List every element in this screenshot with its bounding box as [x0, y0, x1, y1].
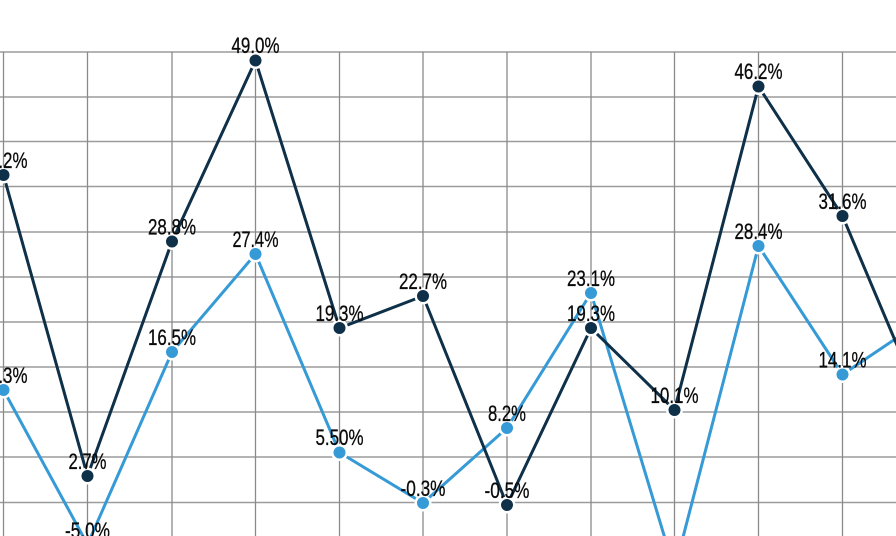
data labels: light blue series: 14.1% [818, 348, 866, 372]
data labels: light blue series [0, 219, 866, 536]
data labels: light blue series: 23.1% [567, 266, 615, 291]
data labels: light blue series: 28.4% [734, 219, 782, 244]
data labels: dark navy series: 49.0% [232, 33, 280, 58]
data labels: dark navy series: 10.1% [650, 383, 698, 408]
data labels: dark navy series: -0.5% [484, 478, 530, 503]
series: light blue line [0, 239, 896, 536]
data labels: light blue series: -0.3% [400, 476, 446, 501]
data labels: light blue series: 8.2% [488, 401, 526, 426]
data labels: dark navy series: 19.3% [567, 301, 615, 326]
data labels: light blue series: 16.5% [148, 325, 196, 350]
data labels: dark navy series: 28.8% [148, 214, 196, 240]
data labels: dark navy series: 46.2% [734, 59, 782, 84]
data labels: dark navy series: 22.7% [399, 269, 447, 294]
data labels: dark navy series: 2.7% [68, 449, 106, 474]
data labels: dark navy series: 31.6% [818, 189, 866, 214]
data labels: dark navy series: 19.3% [316, 301, 364, 326]
data labels: light blue series: 27.4% [232, 227, 278, 252]
data labels: light blue series: 5.50% [316, 425, 364, 450]
